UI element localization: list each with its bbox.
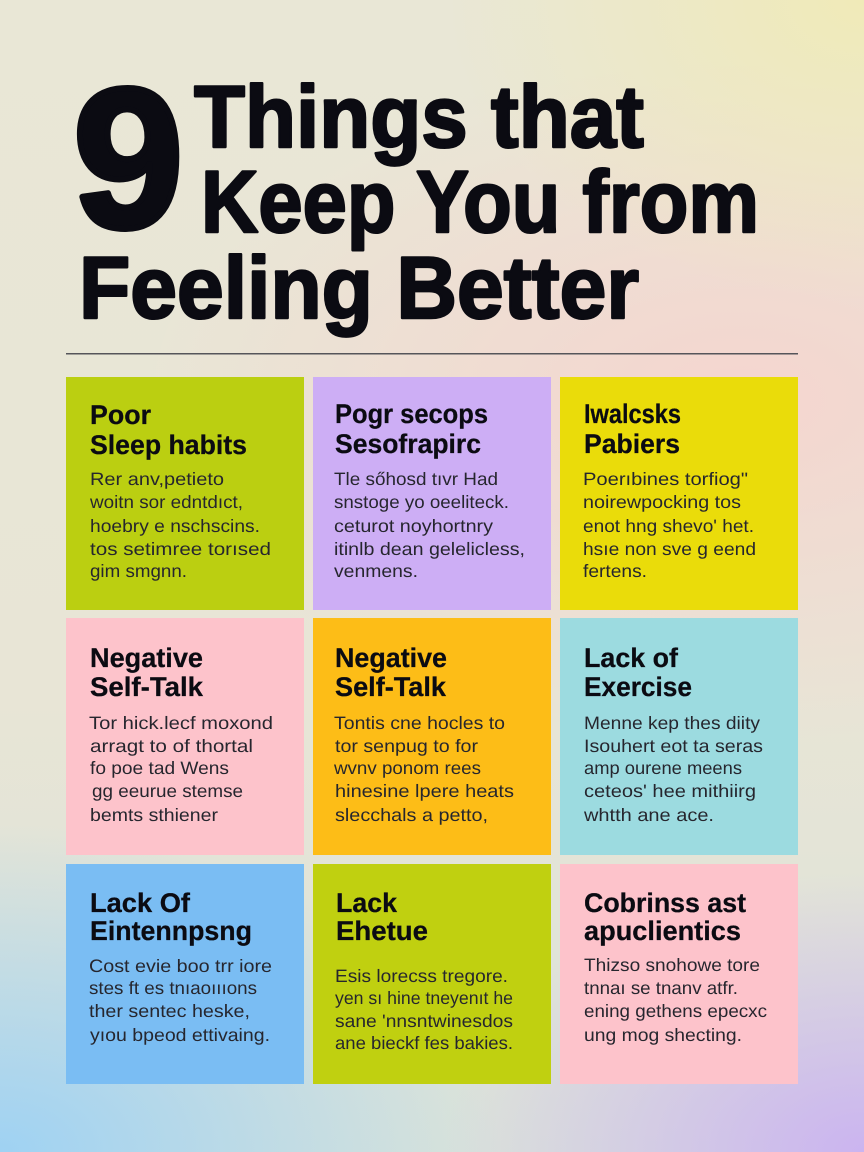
body text: [89, 956, 272, 1045]
panel: negative self-talk pink: [66, 618, 304, 855]
body text: ening gethens epecxc: [584, 1001, 767, 1021]
heading: [90, 643, 204, 702]
heading: Self-Talk: [335, 672, 447, 702]
panel: lack of exercise: [560, 618, 798, 855]
body text: amp ourene meens: [584, 758, 742, 778]
body text: Isouhert eot ta seras: [584, 736, 763, 756]
body text: [89, 469, 271, 581]
heading: Negative: [335, 643, 447, 673]
body text: snstoge yo oeeliteck.: [334, 492, 509, 512]
big number 9: 9: [73, 48, 184, 270]
body text: slecchals a petto,: [335, 805, 488, 825]
body text: stes ft es tnıaoıııons: [89, 978, 257, 998]
body text: ther sentec heske,: [89, 1001, 250, 1021]
heading: Eintennpsng: [90, 916, 252, 946]
heading: [335, 399, 488, 459]
heading: [336, 888, 428, 946]
body text: fertens.: [583, 561, 647, 581]
body text: [89, 713, 273, 825]
body text: ung mog shecting.: [584, 1025, 742, 1045]
heading: Pabiers: [584, 429, 680, 459]
heading: Cobrinss ast: [584, 888, 746, 918]
title line 2: Keep You from: [201, 152, 759, 251]
body text: Tle sőhosd tıvr Had: [334, 469, 498, 489]
heading: [584, 643, 692, 702]
body text: Tor hick.lecf moxond: [89, 713, 273, 733]
heading: Sesofrapirc: [335, 429, 481, 459]
heading: apuclientics: [584, 916, 741, 946]
body text: Rer anv,petieto: [90, 469, 224, 489]
body text: [583, 469, 756, 581]
body text: yen sı hine tneyenıt he: [335, 988, 513, 1008]
body text: [334, 469, 525, 581]
body text: venmens.: [334, 561, 418, 581]
heading: Iwalcsks: [584, 399, 681, 429]
body text: Esis lorecss tregore.: [335, 966, 508, 986]
body text: Thizso snohowe tore: [584, 955, 760, 975]
panel: lack ehetue: [313, 864, 551, 1084]
panel: poor secops: [313, 377, 551, 610]
panel: walcsks pabiers: [560, 377, 798, 610]
heading: Sleep habits: [90, 430, 247, 460]
body text: hinesine lpere heats: [335, 781, 514, 801]
panel: poor sleep habits: [66, 377, 304, 610]
heading: [335, 643, 447, 702]
body text: whtth ane ace.: [583, 805, 714, 825]
heading: Pogr secops: [335, 399, 488, 429]
title line 1: Things that: [194, 67, 644, 166]
body text: sane 'nnsntwinesdos: [335, 1011, 513, 1031]
heading: Lack of: [584, 643, 679, 673]
body text: hoebry e nschscins.: [90, 516, 260, 536]
body text: gg eeurue stemse: [92, 781, 243, 801]
heading: Self-Talk: [90, 672, 204, 702]
panel: cobrinss ast apuclientics: [560, 864, 798, 1084]
body text: noirewpocking tos: [583, 492, 741, 512]
body text: tos setimree torısed: [90, 539, 271, 559]
body text: arragt to of thortal: [90, 736, 253, 756]
body text: bemts sthiener: [90, 805, 218, 825]
body text: tnnaı se tnanv atfr.: [584, 978, 738, 998]
heading: Ehetue: [336, 916, 428, 946]
body text: [333, 713, 514, 825]
body text: fo poe tad Wens: [90, 758, 229, 778]
divider rule: [66, 353, 798, 354]
body text: Cost evie boo trr iore: [89, 956, 272, 976]
body text: Menne kep thes diity: [584, 713, 760, 733]
body text: ceteos' hee mithiirg: [584, 781, 756, 801]
body text: Poerıbines torfiog": [583, 469, 748, 489]
body text: [335, 966, 513, 1053]
heading: Poor: [90, 400, 151, 430]
heading: Negative: [90, 643, 203, 673]
heading: [584, 888, 746, 946]
body text: itinlb dean gelelicless,: [334, 539, 525, 559]
heading: Exercise: [584, 672, 692, 702]
body text: hsıe non sve g eend: [583, 539, 756, 559]
heading: Lack: [336, 888, 398, 918]
body text: Tontis cne hocles to: [334, 713, 505, 733]
body text: ane bieckf fes bakies.: [335, 1033, 513, 1053]
title: [73, 48, 759, 337]
heading: Lack Of: [90, 888, 191, 918]
body text: yıou bpeod ettivaing.: [90, 1025, 270, 1045]
body text: gim smgnn.: [90, 561, 187, 581]
body text: enot hng shevo' het.: [583, 516, 754, 536]
heading: [584, 399, 681, 459]
body text: [583, 713, 763, 825]
body text: tor senpug to for: [335, 736, 478, 756]
panel: lack of entennpsng: [66, 864, 304, 1084]
body text: woitn sor edntdıct,: [89, 492, 243, 512]
body text: wvnv ponom rees: [333, 758, 481, 778]
body text: ceturot noyhortnry: [334, 516, 493, 536]
body text: [584, 955, 767, 1045]
heading: [90, 400, 247, 460]
heading: [90, 888, 252, 946]
title line 3: Feeling Better: [79, 238, 639, 337]
panel: negative self-talk orange: [313, 618, 551, 855]
